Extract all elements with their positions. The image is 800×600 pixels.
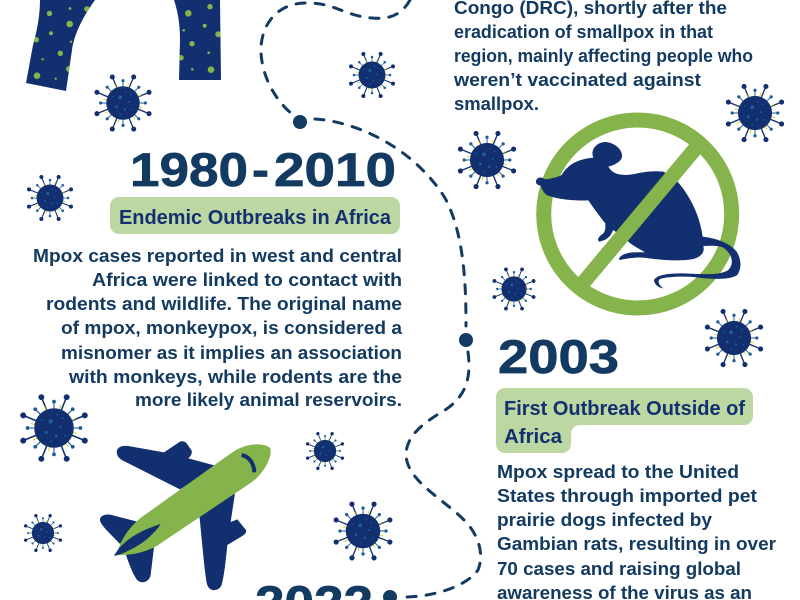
text block: endemic outbreaks: more likely animal reservoirs. — [135, 389, 402, 410]
icon: virus — [726, 84, 784, 142]
icon: virus — [306, 432, 344, 470]
icon: virus — [350, 52, 394, 98]
text block: endemic outbreaks: rodents and wildlife. The original name — [46, 293, 402, 314]
label: Endemic Outbreaks in Africa — [110, 197, 400, 234]
icon: virus — [706, 310, 762, 366]
label: Endemic Outbreaks in Africa: Endemic Outbreaks in Africa — [119, 207, 392, 229]
text block: first outbreak outside Africa — [497, 461, 776, 600]
text block: smallpox context: eradication of smallpox in that — [454, 21, 713, 42]
icon: virus — [334, 502, 392, 560]
text block: smallpox context: region, mainly affecting people who — [454, 45, 753, 66]
icon: virus — [493, 268, 535, 310]
text block: first outbreak outside Africa: States through imported pet — [497, 485, 757, 506]
heading: 2003: 2003 — [498, 330, 619, 383]
heading: 1980-2010 — [130, 143, 396, 196]
heading: 1980-2010: 1980 — [130, 143, 248, 196]
text block: endemic outbreaks: Africa were linked to contact with — [92, 269, 402, 290]
icon: virus — [95, 75, 151, 131]
icon: virus — [458, 132, 516, 188]
label: First Outbreak Outside of Africa: Africa — [504, 426, 563, 448]
icon: airplane — [100, 441, 271, 590]
text block: first outbreak outside Africa: prairie dogs infected by — [497, 509, 713, 530]
timeline dashed path — [261, 0, 481, 600]
text block: endemic outbreaks — [33, 245, 403, 410]
text block: smallpox context: weren’t vaccinated against — [453, 69, 701, 90]
text block: smallpox context — [453, 0, 753, 114]
icon: crossed-out rat — [536, 120, 740, 308]
icon: legs illustration — [26, 0, 221, 91]
icon: virus — [21, 395, 87, 461]
heading: 1980-2010: 2010 — [274, 143, 396, 196]
text block: endemic outbreaks: misnomer as it implies an association — [61, 342, 402, 363]
text block: endemic outbreaks: of mpox, monkeypox, is considered a — [61, 317, 403, 338]
icon: virus — [28, 176, 72, 220]
text block: first outbreak outside Africa: Mpox spread to the United — [497, 461, 739, 482]
icon: virus — [24, 514, 62, 552]
text block: first outbreak outside Africa: Gambian rats, resulting in over — [497, 533, 776, 554]
text block: endemic outbreaks: with monkeys, while rodents are the — [68, 366, 402, 387]
text block: smallpox context: smallpox. — [454, 93, 539, 114]
text block: first outbreak outside Africa: 70 cases and raising global — [497, 558, 741, 579]
label: First Outbreak Outside of Africa: First Outbreak Outside of — [504, 398, 745, 420]
heading: 1980-2010: - — [252, 143, 269, 196]
label: First Outbreak Outside of Africa — [496, 388, 753, 453]
text block: endemic outbreaks: Mpox cases reported in west and central — [33, 245, 402, 266]
